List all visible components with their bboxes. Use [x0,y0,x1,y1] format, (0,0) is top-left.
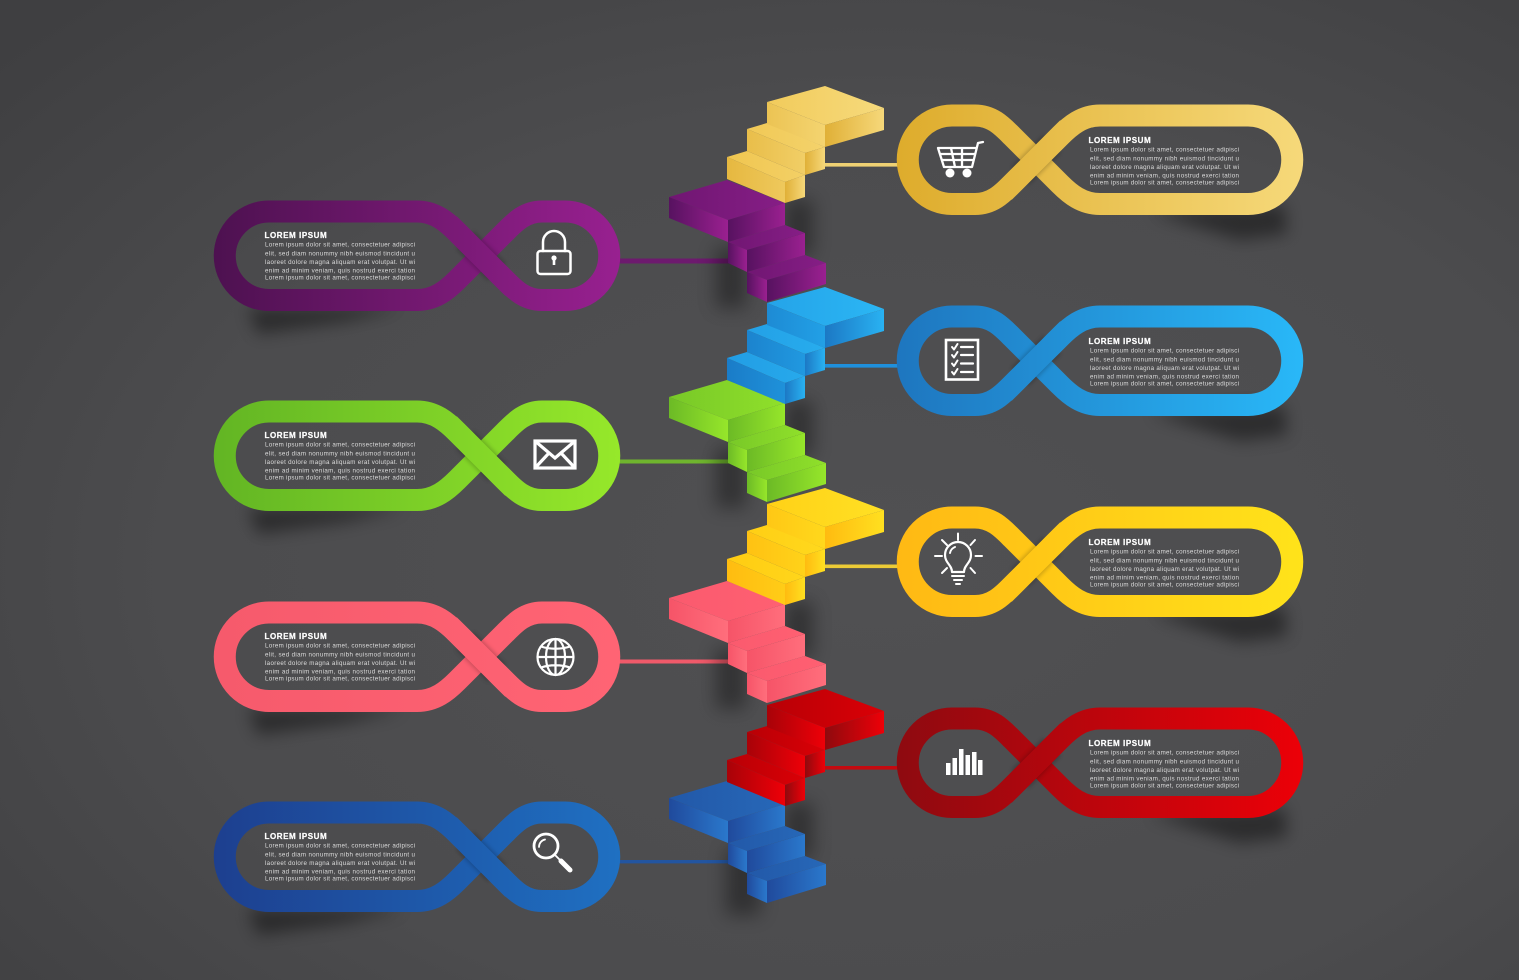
infinity band [225,212,609,300]
text block [264,431,416,482]
text block: Lorem ipsum dolor sit amet, consectetuer adipisci [1090,582,1239,588]
text block: Lorem ipsum dolor sit amet, consectetuer adipisci [1090,348,1239,354]
text block: laoreet dolore magna aliquam erat volutpat. Ut wi [265,259,415,266]
text block: elit, sed diam nonummy nibh euismod tincidunt u [1090,558,1240,564]
icon: envelope [535,441,575,468]
text block: elit, sed diam nonummy nibh euismod tincidunt u [265,852,416,858]
infinity band [908,316,1292,405]
text block [1088,136,1240,186]
text block: Lorem ipsum dolor sit amet, consectetuer adipisci [1090,548,1239,556]
text block: LOREM IPSUM [1088,136,1152,145]
panel: blue checklist [908,316,1292,441]
icon: checklist [946,340,978,380]
text block: elit, sed diam nonummy nibh euismod tincidunt u [265,250,416,258]
text block [1088,337,1240,388]
band shadow [1150,808,1287,843]
text block: laoreet dolore magna aliquam erat volutpat. Ut wi [1090,767,1239,774]
icon: shopping cart [938,142,983,178]
text block: enim ad minim veniam, quis nostrud exerci tation [1090,172,1240,180]
text block: enim ad minim veniam, quis nostrud exerci tation [1090,374,1240,380]
text block: laoreet dolore magna aliquam erat volutpat. Ut wi [1090,164,1239,171]
panel: red bar chart [908,718,1292,843]
icon: globe [538,639,574,675]
stair: green [669,380,826,502]
text block: enim ad minim veniam, quis nostrud exerci tation [1090,776,1240,782]
text block: LOREM IPSUM [1088,337,1152,346]
icon: bar chart [946,749,982,775]
text block: Lorem ipsum dolor sit amet, consectetuer adipisci [265,474,415,482]
staircase shadows [716,200,813,915]
text block: laoreet dolore magna aliquam erat volutpat. Ut wi [265,860,415,867]
text block: enim ad minim veniam, quis nostrud exerci tation [1090,574,1240,582]
stair: red [727,689,884,806]
text block: LOREM IPSUM [1088,739,1152,748]
text block: LOREM IPSUM [264,231,328,240]
text block [264,632,416,682]
stair: bright yellow [727,488,884,605]
infinity band [908,518,1292,606]
text block: Lorem ipsum dolor sit amet, consectetuer adipisci [1090,782,1239,790]
text block: LOREM IPSUM [264,431,328,440]
stair: gold [727,86,884,203]
stair: blue [727,287,884,404]
text block: laoreet dolore magna aliquam erat volutpat. Ut wi [265,660,415,667]
text block: elit, sed diam nonummy nibh euismod tincidunt u [1090,156,1240,162]
panel: purple lock [225,212,609,334]
text block [1088,538,1240,588]
band shadow [1150,406,1287,441]
stair: pink [669,581,826,703]
stair: navy [669,781,826,903]
text block: Lorem ipsum dolor sit amet, consectetuer adipisci [1090,750,1239,756]
panel: green mail [225,412,609,534]
text block: Lorem ipsum dolor sit amet, consectetuer adipisci [265,274,415,282]
panel: navy magnifier [225,812,609,935]
panel: gold cart [908,116,1292,240]
text block: enim ad minim veniam, quis nostrud exerci tation [265,468,416,474]
icon: lightbulb [935,534,982,584]
infinity band [908,718,1292,807]
icon: padlock [538,231,570,274]
infinity band [225,612,609,701]
text block: LOREM IPSUM [264,832,328,841]
text block: laoreet dolore magna aliquam erat volutpat. Ut wi [265,459,415,466]
text block: LOREM IPSUM [1088,538,1152,547]
text block: Lorem ipsum dolor sit amet, consectetuer adipisci [1090,380,1239,388]
connector lines [619,163,898,863]
band shadow [248,308,405,334]
panel: pink globe [225,612,609,735]
infinity band [908,116,1292,204]
text block: Lorem ipsum dolor sit amet, consectetuer adipisci [265,242,415,248]
text block: Lorem ipsum dolor sit amet, consectetuer adipisci [265,842,415,850]
central staircase [669,86,884,903]
text block [264,832,416,882]
text block: enim ad minim veniam, quis nostrud exerci tation [265,668,416,676]
stair: purple [669,180,826,302]
text block: Lorem ipsum dolor sit amet, consectetuer adipisci [265,676,415,682]
text block [1088,739,1240,790]
text block: Lorem ipsum dolor sit amet, consectetuer adipisci [265,642,415,650]
text block: Lorem ipsum dolor sit amet, consectetuer adipisci [265,442,415,448]
band shadow [248,709,405,735]
icon: magnifier [534,834,570,870]
text block: enim ad minim veniam, quis nostrud exerci tation [265,268,416,274]
text block: laoreet dolore magna aliquam erat volutpat. Ut wi [1090,566,1239,573]
infinity band [225,412,609,500]
panel: yellow lightbulb [908,518,1292,642]
infinity band [225,812,609,901]
band shadow [248,508,405,534]
text block: LOREM IPSUM [264,632,328,641]
text block: Lorem ipsum dolor sit amet, consectetuer adipisci [1090,180,1239,186]
text block: enim ad minim veniam, quis nostrud exerci tation [265,868,416,876]
band shadow [1150,607,1287,642]
text block: elit, sed diam nonummy nibh euismod tincidunt u [1090,758,1240,766]
band shadow [248,909,405,935]
text block: laoreet dolore magna aliquam erat volutpat. Ut wi [1090,365,1239,372]
band shadow [1150,205,1287,240]
text block: elit, sed diam nonummy nibh euismod tincidunt u [265,450,416,458]
text block [264,231,416,282]
text block: elit, sed diam nonummy nibh euismod tincidunt u [265,652,416,658]
text block: Lorem ipsum dolor sit amet, consectetuer adipisci [265,876,415,882]
text block: Lorem ipsum dolor sit amet, consectetuer adipisci [1090,146,1239,154]
text block: elit, sed diam nonummy nibh euismod tincidunt u [1090,356,1240,364]
